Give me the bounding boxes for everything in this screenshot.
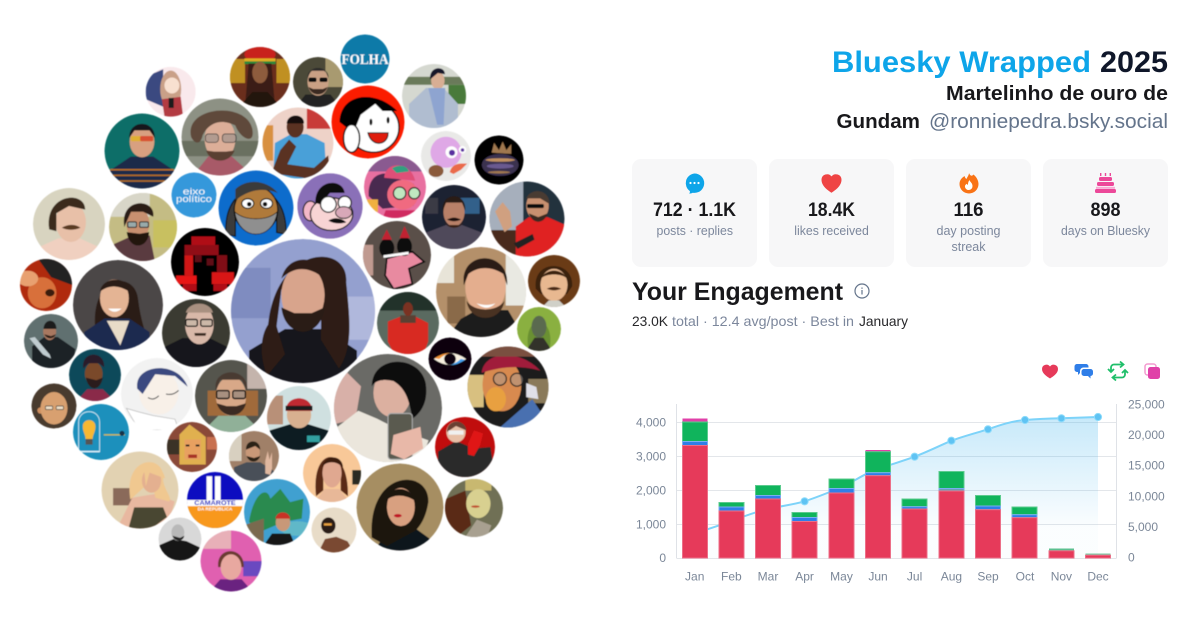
- display name: [836, 83, 1168, 133]
- avatar: pink cartoon with santa hats: [363, 221, 431, 289]
- avatar: man with moustache on light background: [33, 188, 105, 260]
- avatar: man on teal background: [104, 114, 180, 188]
- month labels: Oct: [1016, 570, 1035, 584]
- month labels: Jul: [907, 570, 922, 584]
- avatar: rasta hat: [230, 47, 290, 107]
- panel: days on Bluesky: [1043, 159, 1168, 267]
- month labels: Jun: [868, 570, 888, 584]
- bar: November: [1049, 548, 1074, 558]
- month labels: Mar: [758, 570, 778, 584]
- bar: April: [792, 512, 817, 558]
- stat: streak value: 116: [954, 200, 984, 221]
- engagement summary: 23.0K: [632, 313, 669, 329]
- avatar: man in red Ferrari shirt: [490, 182, 564, 256]
- avatar: anime girl: [146, 67, 196, 117]
- right axis labels: 5,000: [1128, 520, 1158, 534]
- title: Bluesky Wrapped: [832, 46, 1091, 79]
- bar: September: [976, 496, 1000, 558]
- avatar: blue cartoon man: [218, 170, 294, 246]
- avatar: bearded man with curly hair: [109, 193, 177, 261]
- bar: October: [1012, 507, 1037, 558]
- legend icon: reposts: [1108, 362, 1128, 380]
- avatar: man in blue shirt: [262, 108, 334, 178]
- bar: May: [829, 479, 854, 558]
- avatar: dark crown emblem: [474, 136, 524, 184]
- left axis labels: 4,000: [636, 416, 666, 430]
- legend icon: quotes: [1145, 364, 1160, 379]
- avatar: mirror selfie: [334, 354, 442, 462]
- month labels: Sep: [977, 570, 999, 584]
- avatar: man with red cap: [267, 386, 331, 450]
- stat label: likes: likes received: [794, 224, 869, 238]
- avatar: red cartoon face: [332, 86, 404, 158]
- icon: heart: [822, 174, 842, 193]
- avatar: smiling bearded man: [436, 247, 526, 337]
- avatar: man with sunglasses: [293, 57, 343, 107]
- month labels: Dec: [1087, 570, 1109, 584]
- avatar: colourful illustrated character: [364, 156, 426, 218]
- month labels: Jan: [685, 570, 704, 584]
- avatar: small sepia portrait: [312, 508, 356, 552]
- bar: December: [1086, 554, 1110, 558]
- avatar: purple cartoon man: [297, 173, 363, 239]
- avatar: Folha logo: [340, 34, 390, 84]
- avatar: woman with dark curly hair: [356, 464, 444, 550]
- avatar: man in jacket and scarf: [402, 64, 468, 128]
- cumulative area: [695, 417, 1098, 558]
- month labels: Feb: [721, 570, 742, 584]
- stat: days value: 898: [1090, 200, 1120, 221]
- engagement summary: January: [859, 313, 908, 329]
- bar: July: [902, 499, 927, 558]
- month labels: May: [830, 570, 853, 584]
- month labels: Aug: [941, 570, 962, 584]
- avatar: man with parrot sculpture: [244, 479, 313, 545]
- right axis labels: 20,000: [1128, 428, 1165, 442]
- bar: March: [756, 486, 780, 558]
- left axis labels: [636, 416, 666, 565]
- icon: info: [855, 284, 869, 298]
- chart gridlines and axes: [676, 404, 1116, 558]
- avatar: lightbulb in a cage: [73, 404, 129, 460]
- avatar: man in red jacket: [377, 292, 439, 354]
- avatar: man with red cap and round glasses: [468, 346, 548, 428]
- stat label: streak: streak: [952, 240, 986, 254]
- bar: August: [939, 472, 964, 558]
- avatar: Camarote da Republica logo: [187, 472, 243, 528]
- avatar: pixel art face: [167, 422, 217, 472]
- stat: posts and replies value: 712 · 1.1K: [653, 200, 736, 221]
- title: 2025: [1100, 46, 1168, 79]
- bar: February: [719, 502, 744, 558]
- bar: June: [866, 450, 890, 558]
- panel: likes received: [769, 159, 894, 267]
- avatar: cartoon bearded man: [69, 349, 121, 401]
- avatar: woman on pink background: [200, 530, 262, 592]
- avatar: red pixel hood: [171, 228, 239, 296]
- bar: January: [682, 418, 708, 558]
- stat: likes value: 18.4K: [808, 200, 855, 221]
- cumulative points: [801, 413, 1102, 505]
- icon: flame: [960, 173, 978, 194]
- avatar: man with dark glasses and moustache: [162, 299, 230, 367]
- engagement summary: [632, 313, 908, 329]
- avatar: cartoon with red gloves: [435, 417, 495, 477]
- avatar: green elf: [517, 307, 561, 351]
- right axis labels: 25,000: [1128, 398, 1165, 412]
- left axis labels: 3,000: [636, 450, 666, 464]
- avatar: Camarote da Republica logo: CAMAROTE: [194, 500, 236, 507]
- avatar cluster: [17, 34, 580, 592]
- avatar: black and white man: [158, 518, 202, 560]
- right axis labels: [1128, 398, 1165, 564]
- avatar: man with moustache dark room: [422, 185, 486, 249]
- avatar: central large portrait with long hair: [231, 239, 375, 383]
- month labels: [685, 570, 1109, 584]
- avatar: curly hair and glasses: [182, 98, 258, 176]
- avatar: blonde woman: [102, 452, 178, 528]
- avatar: woman on peach background: [303, 444, 361, 502]
- icon: chat bubble: [686, 173, 704, 194]
- legend icon: replies: [1074, 364, 1093, 378]
- avatar: Camarote da Republica logo: DA REPÚBLICA: [198, 507, 232, 512]
- left axis labels: 0: [659, 551, 666, 565]
- avatar: smiling woman with blazer: [73, 260, 163, 350]
- right axis labels: 10,000: [1128, 490, 1165, 504]
- legend icon: likes: [1042, 365, 1058, 378]
- left axis labels: 1,000: [636, 518, 666, 532]
- avatar: bald cartoon with glasses: [32, 384, 76, 428]
- right axis labels: 0: [1128, 550, 1135, 564]
- display name: Gundam: [836, 111, 920, 133]
- avatar: painted portrait: [445, 479, 503, 537]
- panel: posts and replies: [632, 159, 757, 267]
- stat label: days: days on Bluesky: [1061, 224, 1151, 238]
- avatar: eixo politico logo: eixo: [183, 187, 205, 198]
- avatar: pink bird: [421, 131, 471, 181]
- avatar: anime man with blue hair: [121, 358, 193, 430]
- cumulative line: [695, 417, 1098, 533]
- avatar: eixo politico logo: [172, 172, 216, 218]
- chart: monthly engagement bars and cumulative line: [636, 398, 1165, 584]
- left axis labels: 2,000: [636, 484, 666, 498]
- avatar: man in black t-shirt: [24, 314, 78, 368]
- icon: birthday cake: [1095, 173, 1116, 193]
- handle: @ronniepedra.bsky.social: [929, 111, 1168, 133]
- avatar: close-up red face: [17, 259, 72, 311]
- display name: Martelinho de ouro de: [946, 83, 1168, 105]
- avatar: eixo politico logo: político: [176, 194, 212, 205]
- avatar: man with glasses and goatee: [195, 360, 267, 432]
- stat label: posts and replies: posts · replies: [656, 224, 733, 238]
- avatar: man with moustache brown background: [528, 255, 580, 307]
- right axis labels: 15,000: [1128, 458, 1165, 472]
- stat label: streak: [936, 224, 1001, 254]
- heading: Your Engagement: Your Engagement: [632, 278, 844, 306]
- engagement summary: total · 12.4 avg/post · Best in: [672, 313, 854, 329]
- month labels: Nov: [1051, 570, 1072, 584]
- panel: posting streak: [906, 159, 1031, 267]
- chart legend: [1042, 362, 1160, 380]
- stat label: streak: day posting: [936, 224, 1001, 238]
- avatar: Folha logo: FOLHA: [341, 52, 389, 68]
- avatar: eye symbol: [428, 338, 472, 380]
- month labels: Apr: [795, 570, 814, 584]
- avatar: man making peace sign: [229, 431, 279, 481]
